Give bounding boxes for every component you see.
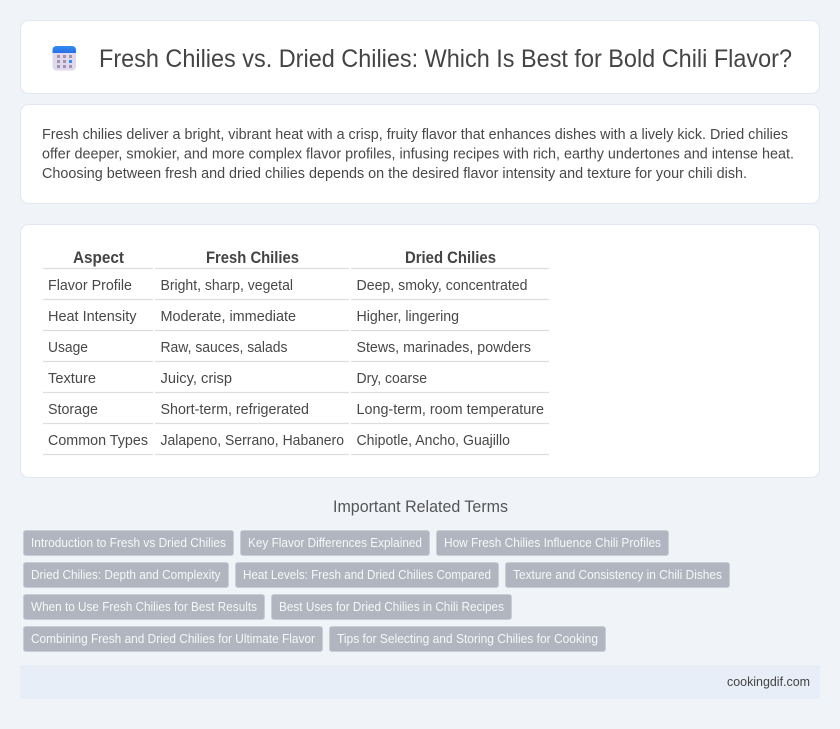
chip [24,594,264,620]
table row: texture: Texture [48,371,96,387]
table row: storage: Long-term, room temperature [356,402,544,418]
panel: introduction [20,104,820,204]
chip [330,626,606,652]
chip: Key Flavor Differences Explained [248,536,422,550]
heading: important related terms: Important Related Terms [333,498,508,516]
table row: storage: Short-term, refrigerated [160,402,309,418]
table row: texture: Juicy, crisp [160,371,232,387]
table row: common types [48,433,510,449]
chip: Heat Levels: Fresh and Dried Chilies Compared [243,568,491,582]
chip [272,594,512,620]
chip: When to Use Fresh Chilies for Best Results [31,600,257,614]
table row: usage [48,340,531,356]
chip: Introduction to Fresh vs Dried Chilies [31,536,226,550]
chip: How Fresh Chilies Influence Chili Profiles [444,536,661,550]
chip: Texture and Consistency in Chili Dishes [513,568,722,582]
table header: Dried Chilies [405,249,496,267]
text block: introduction paragraph: offer deeper, smokier, and more complex flavor profiles, infusing recipes with rich, earthy undertones and intense heat. [42,146,794,162]
table row: usage: Usage [48,340,88,356]
chip: Combining Fresh and Dried Chilies for Ultimate Flavor [31,632,315,646]
chip: Tips for Selecting and Storing Chilies for Cooking [337,632,598,646]
footer [20,665,820,699]
panel: comparison table [20,224,820,478]
table header: Aspect [73,249,124,267]
table row: common types: Common Types [48,433,148,449]
footer source text: cookingdif.com [727,675,810,689]
table row: usage: Stews, marinades, powders [356,340,531,356]
table row: storage: Storage [48,402,98,418]
table row: heat intensity [48,309,459,325]
table row: common types: Jalapeno, Serrano, Habanero [160,433,344,449]
icon: calendar [52,46,76,70]
text block: introduction paragraph [42,127,794,182]
title: Fresh Chilies vs. Dried Chilies: Which Is Best for Bold Chili Flavor? [99,45,792,73]
chip [24,626,322,652]
chip [24,562,228,588]
table row: heat intensity: Higher, lingering [356,309,459,325]
chip: Dried Chilies: Depth and Complexity [31,568,221,582]
panel: title card [20,20,820,94]
chip [436,530,668,556]
panel: related term chips [24,530,730,652]
table row: storage [48,402,544,418]
table row: flavor profile: Deep, smoky, concentrated [356,278,528,294]
table row: heat intensity: Moderate, immediate [160,309,296,325]
table row: flavor profile [48,278,528,294]
table header: Fresh Chilies [206,249,299,267]
chip [24,530,234,556]
chip [506,562,730,588]
table row: flavor profile: Flavor Profile [48,278,132,294]
table row: texture [48,371,427,387]
table row: texture: Dry, coarse [356,371,427,387]
chip [236,562,498,588]
text block: introduction paragraph: Fresh chilies deliver a bright, vibrant heat with a crisp, fruity flavor that enhances dishes with a lively kick. Dried chilies [42,127,788,143]
text block: introduction paragraph: Choosing between fresh and dried chilies depends on the desired flavor intensity and texture for your chili dish. [42,166,747,182]
table header [73,249,496,267]
chip: Best Uses for Dried Chilies in Chili Recipes [279,600,504,614]
table row: flavor profile: Bright, sharp, vegetal [160,278,293,294]
table row: usage: Raw, sauces, salads [160,340,288,356]
table row: common types: Chipotle, Ancho, Guajillo [356,433,510,449]
chip [240,530,430,556]
table row: heat intensity: Heat Intensity [48,309,137,325]
